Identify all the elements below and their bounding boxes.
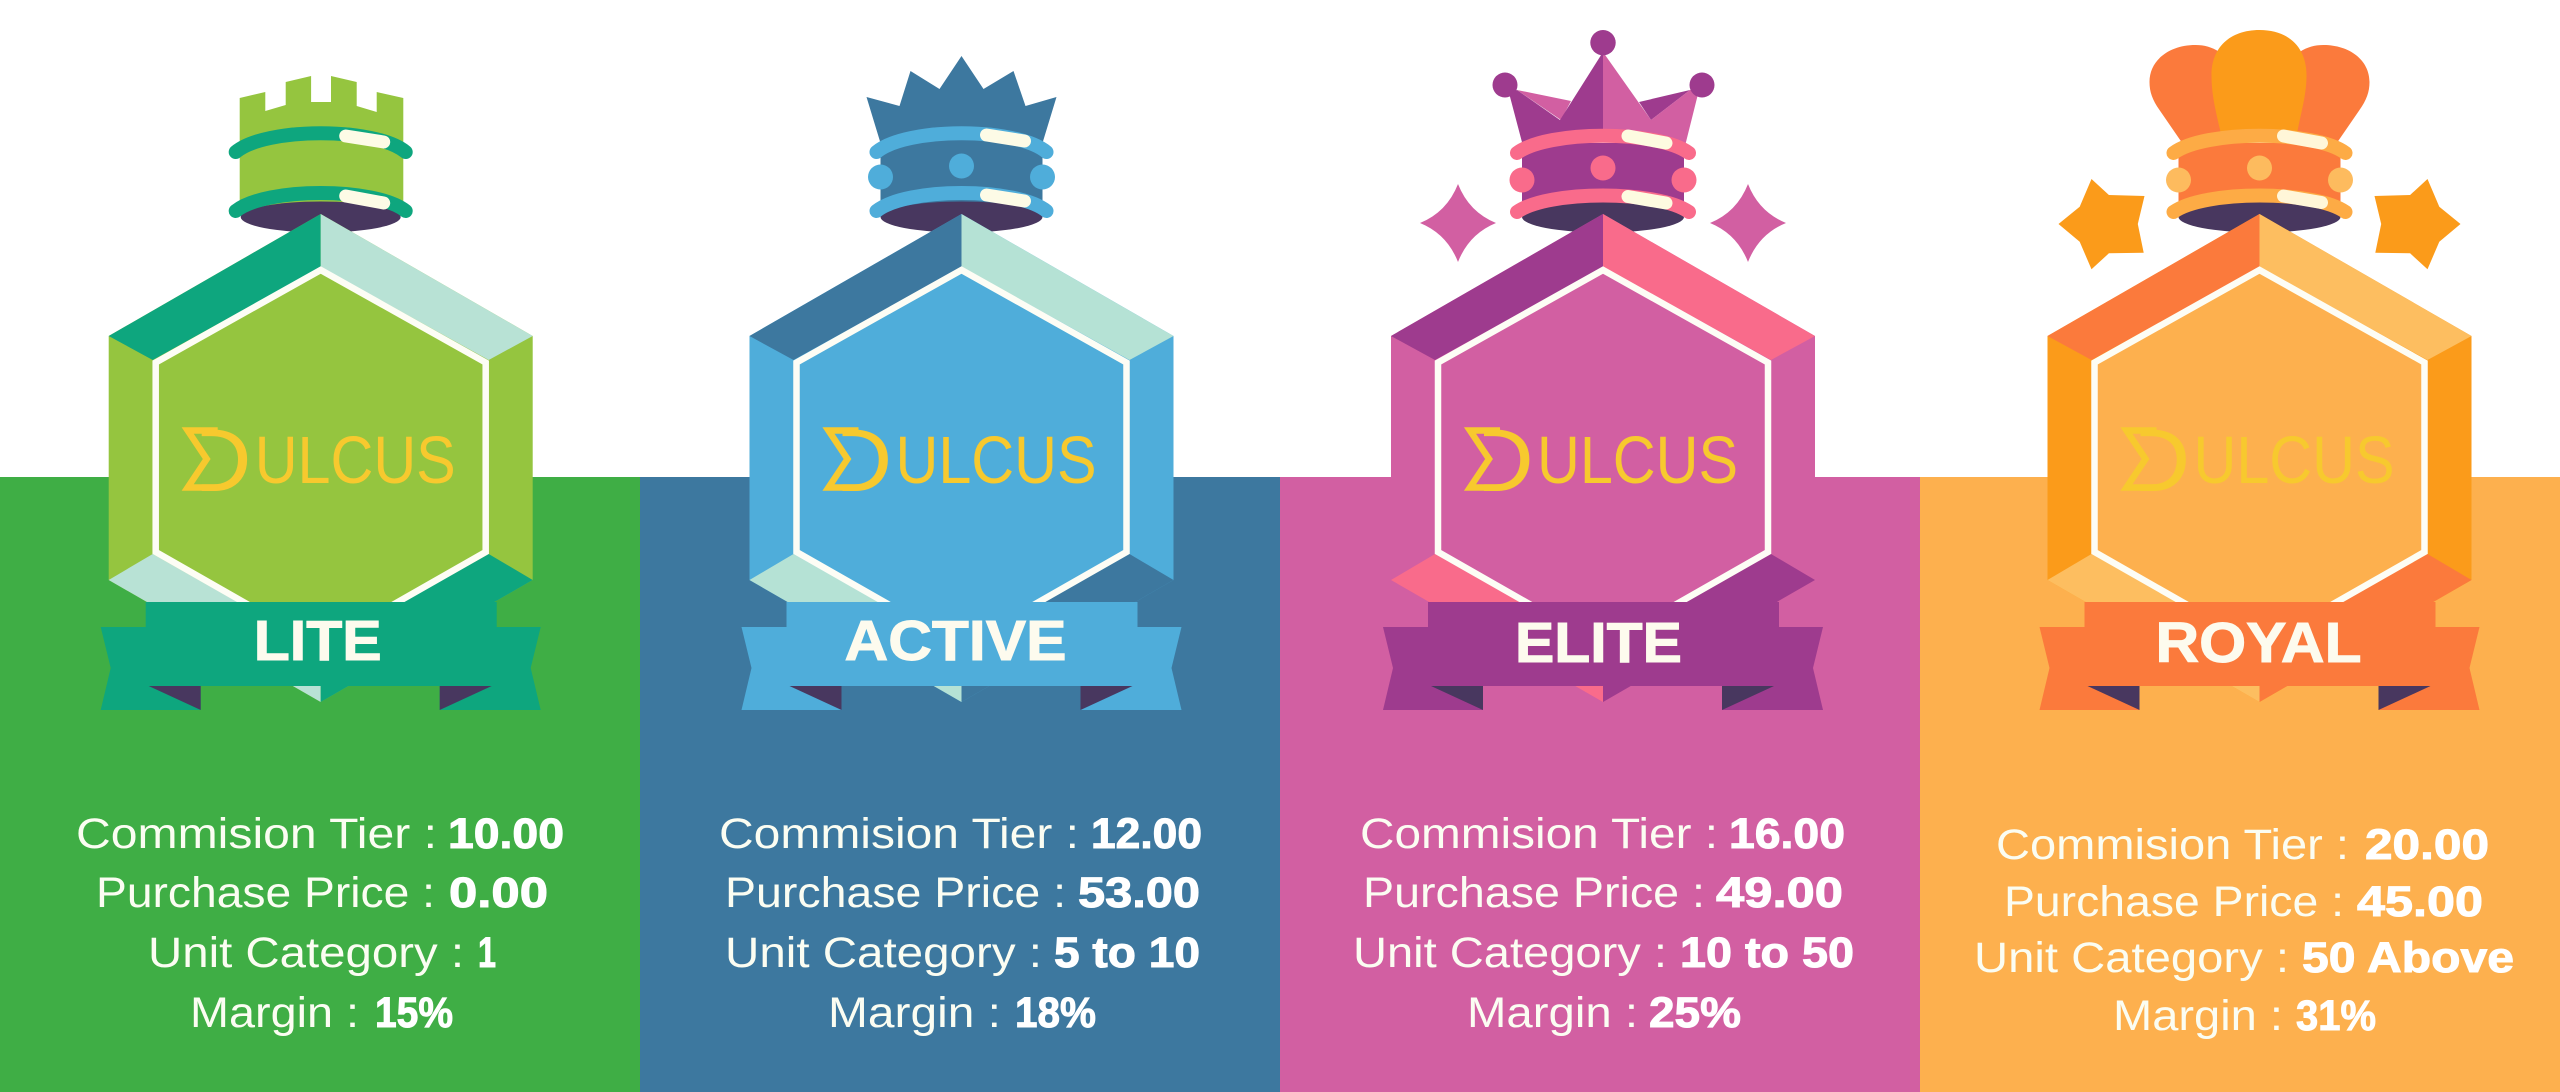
icon: right sparkle [1710, 184, 1786, 262]
stats: active: 12.00 [1091, 810, 1202, 858]
stats: royal [1974, 821, 2514, 1040]
stats: royal: 31% [2296, 992, 2376, 1040]
hexagon badge body [750, 214, 1174, 702]
stats: lite: Margin : [190, 989, 359, 1037]
stats: elite: 10 to 50 [1680, 929, 1854, 977]
stats: lite: 15% [375, 989, 453, 1037]
stats: elite: Commision Tier : [1360, 810, 1718, 858]
stats: elite: Margin : [1467, 989, 1638, 1037]
logo: Dulcus [822, 410, 1096, 510]
stats: royal: Purchase Price : [2004, 878, 2344, 926]
stats: royal: 50 Above [2302, 934, 2514, 982]
logo: Dulcus: ULCUS [896, 423, 1096, 498]
stats: active: 18% [1015, 989, 1096, 1037]
icon: left star [2058, 179, 2144, 269]
hexagon badge body [2048, 214, 2472, 702]
stats: active: 53.00 [1078, 869, 1200, 917]
ribbon: elite [1383, 602, 1823, 710]
icon: tower crown [236, 76, 406, 232]
hexagon badge body [1391, 214, 1815, 702]
stats: lite: 10.00 [448, 810, 564, 858]
badge: elite [1383, 30, 1823, 710]
logo: Dulcus [1464, 410, 1738, 510]
panel: elite background [1280, 477, 1921, 1092]
ribbon: active: ACTIVE [844, 609, 1066, 673]
stats: royal: Margin : [2113, 992, 2283, 1040]
stats: royal: Unit Category : [1974, 934, 2289, 982]
ribbon: elite: ELITE [1515, 611, 1682, 675]
icon: ball crown [1492, 30, 1714, 232]
icon: left sparkle [1420, 184, 1496, 262]
badge: lite [101, 76, 541, 710]
logo: Dulcus: ULCUS [255, 423, 456, 498]
panel: lite background [0, 477, 641, 1092]
ribbon: lite: LITE [254, 609, 382, 673]
stats: elite: 49.00 [1716, 869, 1843, 917]
stats: elite: Unit Category : [1353, 929, 1667, 977]
stats: elite [1353, 810, 1854, 1037]
stats: lite: Unit Category : [148, 929, 464, 977]
logo: Dulcus [182, 410, 456, 510]
logo: Dulcus: D [1464, 410, 1534, 510]
ribbon: royal: ROYAL [2156, 611, 2362, 675]
stats: active: Unit Category : [725, 929, 1042, 977]
stats: active: Margin : [828, 989, 1001, 1037]
stats: lite: Commision Tier : [76, 810, 437, 858]
stats: lite: 1 [478, 929, 496, 977]
stats: royal: 45.00 [2357, 878, 2483, 926]
logo: Dulcus: ULCUS [1537, 423, 1738, 498]
panel: active background [640, 477, 1281, 1092]
panel: royal background [1920, 477, 2560, 1092]
stats: elite: 16.00 [1729, 810, 1845, 858]
ribbon: royal [2040, 602, 2480, 710]
stats: royal: Commision Tier : [1996, 821, 2349, 869]
stats: active: 5 to 10 [1054, 929, 1200, 977]
stats: lite: Purchase Price : [96, 869, 435, 917]
stats: active: Commision Tier : [719, 810, 1079, 858]
badge: royal [2040, 30, 2480, 710]
icon: royal crown [2150, 30, 2370, 232]
logo: Dulcus: ULCUS [2194, 423, 2394, 498]
icon: spiked crown [866, 56, 1056, 232]
stats: active: Purchase Price : [725, 869, 1066, 917]
stats: royal: 20.00 [2365, 821, 2489, 869]
stats: lite: 0.00 [449, 869, 548, 917]
ribbon: lite [101, 602, 541, 710]
hexagon badge body [109, 214, 533, 702]
ribbon: active [742, 602, 1182, 710]
stats: active [719, 810, 1202, 1037]
logo: Dulcus [2120, 410, 2394, 510]
stats: elite: 25% [1649, 989, 1741, 1037]
icon: right star [2374, 179, 2460, 269]
logo: Dulcus: D [182, 410, 252, 510]
logo: Dulcus: D [822, 410, 892, 510]
badge: active [742, 56, 1182, 710]
stats: elite: Purchase Price : [1363, 869, 1705, 917]
stats: lite [76, 810, 564, 1037]
logo: Dulcus: D [2120, 410, 2190, 510]
